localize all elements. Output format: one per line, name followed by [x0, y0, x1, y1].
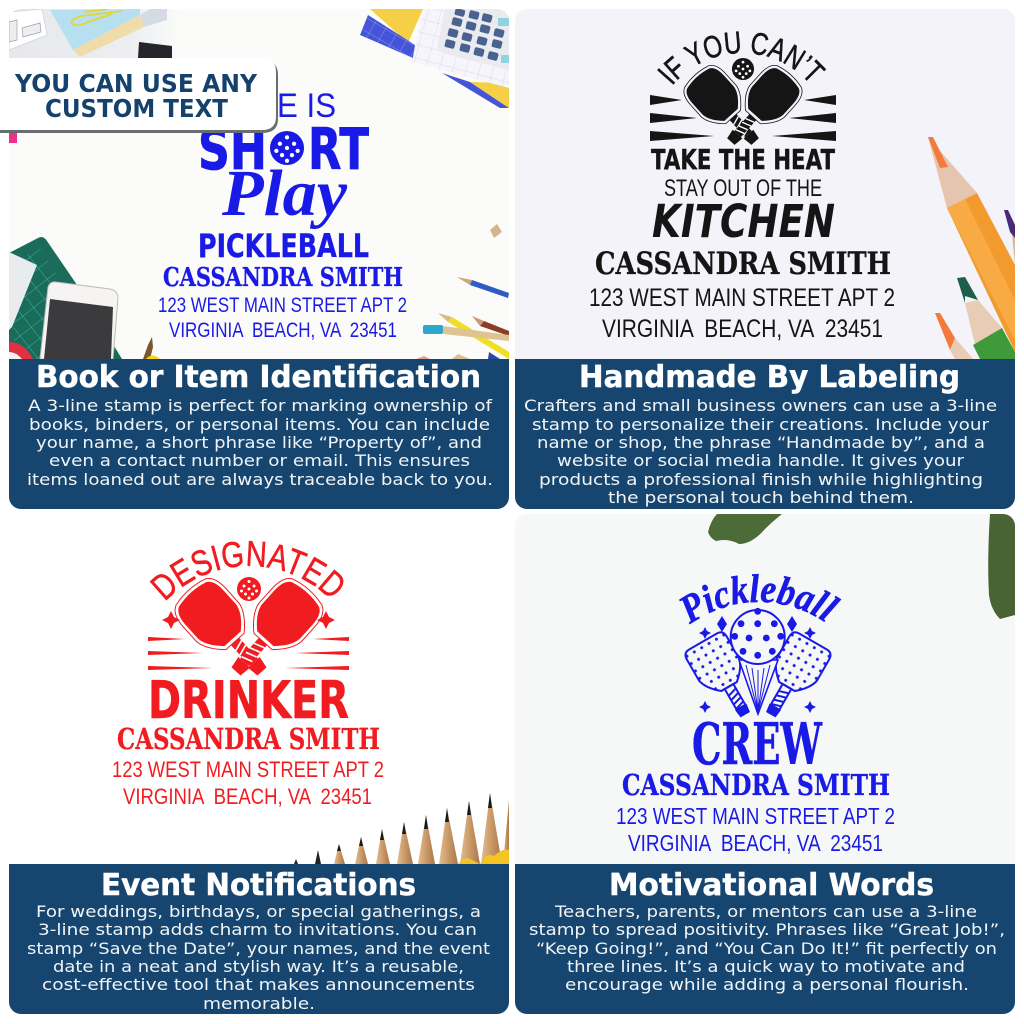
panel: book or item identification	[9, 8, 509, 509]
caption bar: event notifications: Event Notifications	[101, 868, 416, 903]
caption bar: book or item identification: Book or Item Identification	[36, 360, 481, 395]
caption bar: handmade by labeling	[515, 359, 1015, 509]
caption bar: event notifications: cost-effective tool that makes announcements	[42, 975, 475, 994]
caption bar: event notifications: memorable.	[203, 994, 315, 1013]
stamp: life is short play pickleball: PICKLEBALL	[198, 227, 369, 265]
caption bar: book or item identification: items loaned out are always traceable back to you.	[27, 470, 493, 489]
panel: motivational words	[515, 514, 1015, 1014]
caption bar: handmade by labeling: Crafters and small business owners can use a 3-line	[524, 396, 997, 415]
stamp: pickleball crew: CREW	[692, 711, 823, 778]
panel: handmade by labeling	[515, 9, 1015, 509]
caption bar: book or item identification: your name, a short phrase like “Property of”, and	[36, 433, 482, 452]
stamp: life is short play pickleball: VIRGINIA BEACH, VA 23451	[169, 319, 397, 342]
caption bar: handmade by labeling: name or shop, the phrase “Handmade by”, and a	[537, 433, 985, 452]
caption bar: handmade by labeling: website or social media handle. It gives your	[557, 451, 964, 470]
stamp: life is short play pickleball: LIFE IS	[232, 87, 336, 125]
caption bar: book or item identification	[9, 359, 509, 509]
stamp: life is short play pickleball: 123 WEST MAIN STREET APT 2	[158, 294, 407, 317]
caption bar: motivational words: Motivational Words	[609, 868, 934, 903]
caption bar: event notifications: stamp “Save the Date”, your names, and the event	[27, 939, 490, 958]
icon: left paddle	[684, 631, 750, 718]
caption bar: event notifications	[9, 864, 509, 1014]
stamp: pickleball crew: Pickleball	[679, 574, 842, 624]
stamp: if you can't take the heat: 123 WEST MAIN STREET APT 2	[589, 284, 895, 312]
stamp: pickleball crew: VIRGINIA BEACH, VA 23451	[628, 830, 883, 856]
stamp: if you can't take the heat: CASSANDRA SMITH	[595, 246, 891, 282]
caption bar: motivational words: stamp to spread positivity. Phrases like “Great Job!”,	[529, 920, 1005, 939]
stamp: if you can't take the heat: KITCHEN	[652, 195, 835, 248]
photo: colored pencils bottom right	[416, 224, 509, 359]
panel: event notifications	[9, 540, 509, 1014]
caption bar: event notifications: date in a neat and stylish way. It’s a reusable,	[53, 957, 464, 976]
stamp: life is short play pickleball	[158, 87, 407, 342]
stamp: designated drinker: DRINKER	[148, 671, 349, 731]
caption bar: handmade by labeling: products a professional finish while highlighting	[539, 470, 983, 489]
badge: you can use any custom text: CUSTOM TEXT	[45, 94, 228, 123]
caption bar: motivational words: “Keep Going!”, and “You Can Do It!” fit perfectly on	[536, 939, 997, 958]
caption bar: motivational words: Teachers, parents, or mentors can use a 3-line	[554, 902, 977, 921]
badge: you can use any custom text	[0, 58, 278, 133]
caption bar: handmade by labeling: the personal touch behind them.	[608, 488, 914, 507]
caption bar: event notifications: For weddings, birthdays, or special gatherings, a	[36, 902, 481, 921]
stamp: pickleball crew: CASSANDRA SMITH	[622, 768, 890, 802]
stamp: life is short play pickleball: SH	[198, 117, 267, 183]
stamp: life is short play pickleball: CASSANDRA SMITH	[163, 263, 403, 293]
caption bar: motivational words	[515, 864, 1015, 1014]
icon: ball with trail	[731, 608, 785, 714]
caption bar: book or item identification: A 3-line stamp is perfect for marking ownership of	[28, 396, 492, 415]
photo: green leaves	[708, 514, 1015, 619]
icon: right paddle	[766, 631, 832, 718]
stamp: designated drinker: DESIGNATED	[150, 540, 344, 600]
stamp: if you can't take the heat: STAY OUT OF THE	[664, 175, 822, 202]
photo: cutting mat, ruler and phone	[9, 133, 160, 359]
stamp: pickleball crew: 123 WEST MAIN STREET APT 2	[616, 803, 895, 829]
badge: you can use any custom text: YOU CAN USE ANY	[14, 69, 257, 98]
photo: row of sharpened pencils	[294, 793, 509, 864]
caption bar: handmade by labeling: Handmade By Labeling	[579, 360, 960, 395]
stamp: life is short play pickleball: Play	[221, 157, 348, 230]
caption bar: event notifications: 3-line stamp adds charm to invitations. You can	[38, 920, 477, 939]
stamp: designated drinker: VIRGINIA BEACH, VA 23451	[123, 784, 372, 809]
icon: sparkles	[699, 616, 816, 713]
stamp: if you can't take the heat: TAKE THE HEAT	[651, 143, 835, 176]
stamp: if you can't take the heat: IF YOU CAN’T	[657, 31, 826, 85]
caption bar: book or item identification: books, binders, or personal items. You can include	[29, 415, 490, 434]
caption bar: book or item identification: even a contact number or email. This ensures	[49, 451, 470, 470]
stamp: if you can't take the heat	[590, 31, 894, 340]
stamp: designated drinker	[113, 540, 384, 807]
stamp: designated drinker: CASSANDRA SMITH	[117, 722, 380, 756]
stamp: designated drinker: 123 WEST MAIN STREET APT 2	[112, 757, 384, 782]
photo: colored pencils	[928, 137, 1015, 359]
caption bar: handmade by labeling: stamp to personalize their creations. Include your	[532, 415, 989, 434]
caption bar: motivational words: encourage while adding a personal flourish.	[565, 975, 969, 994]
photo: desk items top left	[9, 9, 181, 58]
photo: calculator and notebooks top right	[360, 8, 509, 108]
caption bar: motivational words: three lines. It’s a quick way to motivate and	[567, 957, 965, 976]
stamp: life is short play pickleball: RT	[308, 117, 369, 183]
stamp: pickleball crew	[617, 574, 894, 854]
stamp: if you can't take the heat: VIRGINIA BEACH, VA 23451	[602, 315, 883, 343]
